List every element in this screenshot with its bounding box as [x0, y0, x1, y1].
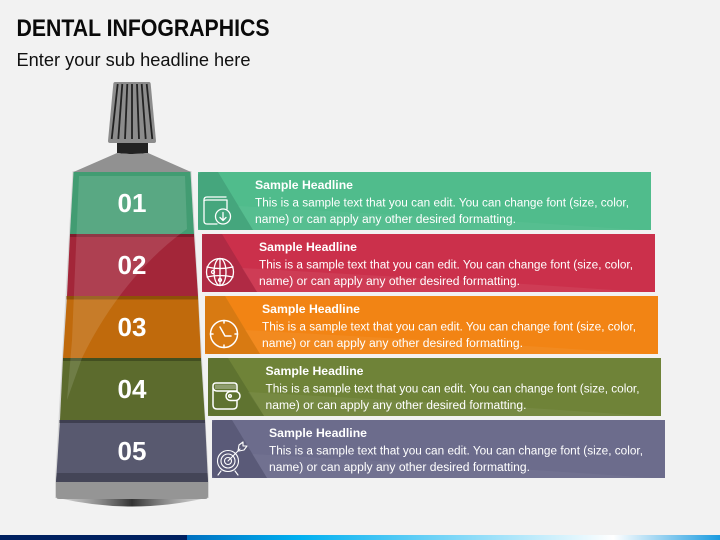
band 02 [67, 234, 198, 296]
band 01 [70, 172, 194, 234]
band 04 [60, 358, 205, 420]
tube soft edge [56, 172, 208, 497]
panel 4 [208, 358, 661, 416]
tube gloss highlight [67, 176, 187, 400]
panel 4: This is a sample text that you can edit. You can change font (size, color, [266, 384, 640, 396]
panel 3: name) or can apply any other desired formatting. [262, 338, 523, 350]
panel 3 [205, 296, 658, 354]
panel 5: Sample Headline [269, 426, 367, 440]
footer colour bar [0, 535, 720, 540]
toothpaste tube [56, 82, 208, 506]
band numbers: 05 [118, 436, 146, 466]
title: DENTAL INFOGRAPHICS [16, 15, 270, 42]
tube shoulder [74, 153, 191, 172]
panel 2: Sample Headline [259, 240, 357, 254]
panel 2 [202, 234, 655, 292]
panel 3: This is a sample text that you can edit. You can change font (size, color, [262, 322, 636, 334]
icon: clock [210, 320, 238, 348]
panel 5: name) or can apply any other desired formatting. [269, 462, 530, 474]
panel 1 [198, 172, 651, 230]
tube cap [108, 82, 156, 143]
icon: book with download [204, 197, 230, 224]
panel 1: name) or can apply any other desired formatting. [255, 214, 516, 226]
subtitle: Enter your sub headline here [16, 49, 250, 70]
band numbers: 02 [118, 250, 146, 280]
panel 4: name) or can apply any other desired formatting. [266, 400, 526, 412]
icon: globe [206, 258, 234, 286]
band 01: 01 [118, 188, 146, 218]
band numbers: 04 [118, 374, 147, 404]
panel 1: This is a sample text that you can edit. You can change font (size, color, [255, 198, 629, 210]
panel 4: Sample Headline [266, 364, 364, 378]
tube crimp [56, 482, 208, 499]
panel 1: Sample Headline [255, 178, 353, 192]
band 03 [63, 296, 201, 358]
band numbers [118, 250, 147, 466]
panel 2: name) or can apply any other desired formatting. [259, 276, 520, 288]
panel 3: Sample Headline [262, 302, 360, 316]
band numbers: 03 [118, 312, 146, 342]
panel 5: This is a sample text that you can edit. You can change font (size, color, [269, 446, 643, 458]
icon: target with arrow [218, 442, 247, 475]
tube crimp shadow [58, 498, 206, 506]
panel 5 [212, 420, 665, 478]
band 05 [56, 420, 208, 482]
icon: wallet [213, 383, 240, 409]
panel 2: This is a sample text that you can edit. You can change font (size, color, [259, 260, 633, 272]
tube neck [117, 143, 148, 154]
